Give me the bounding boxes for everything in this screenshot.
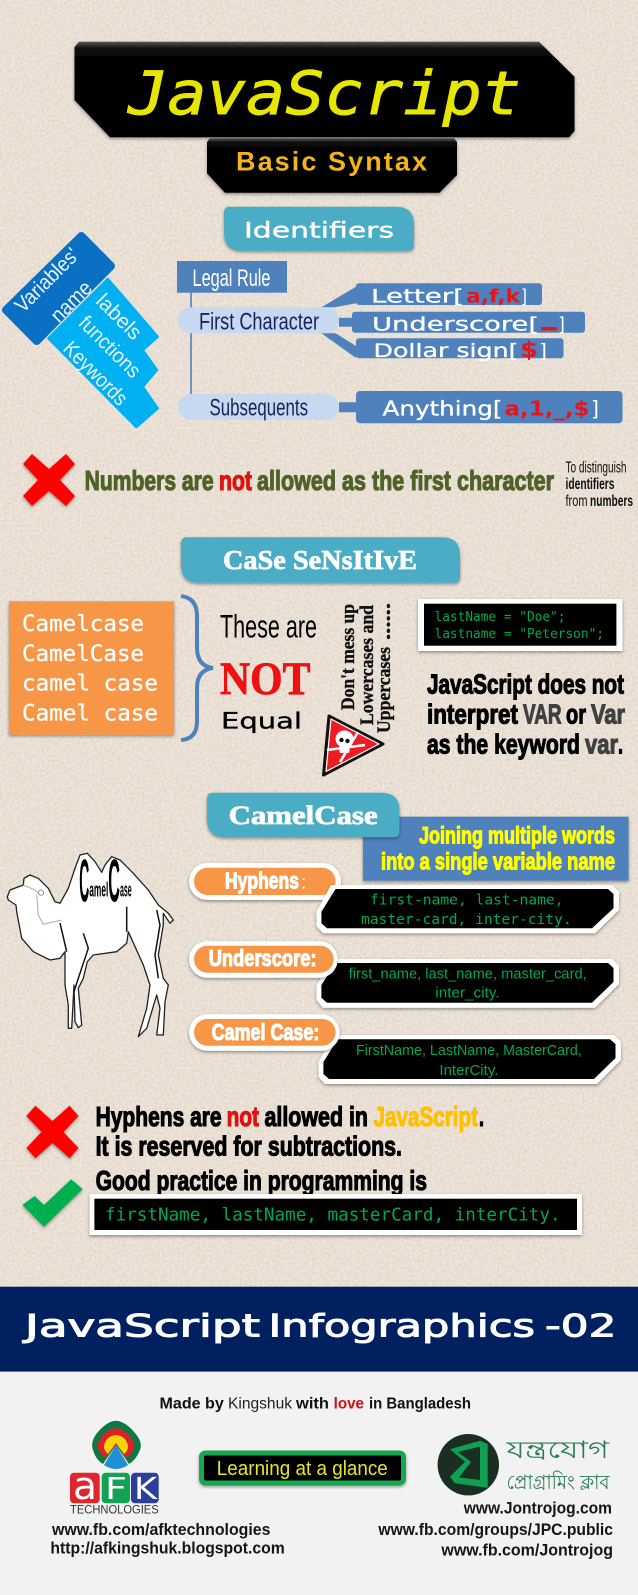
underscore rule [352, 312, 585, 336]
row: hyphens [189, 863, 619, 933]
text: var keyword: VAR [523, 698, 562, 729]
links: jontrojog: www.fb.com/Jontrojog [440, 1541, 613, 1560]
tagline badge [202, 1453, 404, 1483]
underscore rule: ] [558, 314, 565, 336]
links: jontrojog: www.Jontrojog.com [463, 1498, 612, 1517]
logo: afk [70, 1421, 159, 1516]
camel case example: FirstName, LastName, MasterCard, [356, 1042, 582, 1059]
row: camel case [189, 1014, 621, 1084]
warning: hyphens not allowed [96, 1101, 484, 1162]
subsequents pill: Subsequents [210, 395, 308, 422]
tagline badge: Learning at a glance [217, 1458, 388, 1480]
camel case label: Camel Case: [212, 1019, 319, 1045]
letter rule: a,f,k [466, 286, 520, 308]
warning: numbers not allowed: Numbers are [85, 465, 214, 496]
panel: camelcase variants: Camel case [22, 701, 158, 727]
anything rule: Anything[ [382, 397, 502, 421]
panel: camelcase variants [9, 601, 174, 735]
rotated labels: labels [91, 289, 146, 345]
heading: case sensitive: CaSe SeNsItIvE [223, 545, 417, 575]
hyphens label: : [301, 872, 306, 893]
band: series title [0, 1287, 638, 1372]
illustration: camel: ase [120, 880, 132, 902]
text: these are not equal: These are [220, 609, 317, 645]
code sample: lastName = "Doe"; [434, 610, 566, 625]
links: jontrojog [377, 1498, 613, 1560]
text: these are not equal [220, 609, 317, 734]
text: var keyword: or [566, 698, 586, 729]
rotated warning text: Uppercases [374, 647, 395, 733]
panel: camelcase variants: Camelcase [22, 611, 144, 637]
underscore example: inter_city. [435, 984, 500, 1001]
warning: hyphens not allowed: JavaScript [374, 1101, 478, 1132]
camel lettering: amel [89, 880, 108, 902]
camel case example [319, 1035, 621, 1084]
rotated labels: Keywords [58, 337, 132, 410]
letter rule [356, 283, 542, 308]
light blue staircase [49, 279, 157, 427]
logo: jontrojog [438, 1434, 611, 1495]
side note [566, 459, 633, 510]
credit line: Kingshuk [228, 1395, 292, 1412]
links: afk [50, 1520, 285, 1557]
heading: camelcase: CamelCase [229, 801, 378, 830]
rotated warning text [338, 603, 395, 733]
hyphens label: Hyphens [225, 867, 299, 893]
hyphens example [316, 885, 619, 933]
first character pill: First Character [199, 308, 319, 335]
rotated labels: Variables' [10, 244, 84, 317]
warning: hyphens not allowed: Hyphens are [96, 1101, 222, 1132]
underscore label: Underscore: [209, 945, 316, 971]
side note: from [566, 493, 588, 510]
underscore rule: Underscore[ [372, 314, 539, 336]
footer [0, 1372, 638, 1595]
dollar rule: Dollar sign[ [374, 340, 518, 362]
subtitle banner [207, 138, 457, 193]
text: var keyword: as the keyword [427, 728, 580, 759]
dollar rule: $ [520, 338, 538, 362]
legal rule box [177, 261, 287, 293]
text: var keyword: interpret [427, 698, 518, 729]
title banner: JavaScript [127, 59, 521, 129]
logo: jontrojog: প্রোগ্রামিং ক্লাব [506, 1471, 610, 1494]
good practice code [90, 1194, 582, 1235]
band: series title: Infographics [268, 1309, 535, 1345]
anything rule [356, 391, 622, 423]
dark blue tab [6, 236, 111, 341]
credit line: in Bangladesh [369, 1395, 471, 1412]
warning: numbers not allowed: not [219, 465, 252, 496]
warning: hyphens not allowed: It is reserved for subtractions. [96, 1131, 402, 1162]
hyphens label [189, 863, 341, 900]
camel case label [189, 1014, 340, 1051]
underscore example [316, 959, 619, 1008]
panel: camelcase variants: camel case [22, 671, 158, 697]
dollar rule: ] [539, 340, 547, 362]
text: var keyword: var [585, 728, 618, 759]
underscore example: first_name, last_name, master_card, [349, 965, 587, 982]
heading: case sensitive [181, 537, 460, 583]
code sample [418, 599, 622, 651]
diagram: legal rule tree [177, 261, 622, 423]
panel: camelcase variants: CamelCase [22, 641, 144, 667]
connectors [321, 287, 356, 412]
text: var keyword: . [618, 728, 623, 759]
credit line [160, 1395, 471, 1412]
warning: hyphens not allowed: . [479, 1101, 484, 1132]
warning: hyphens not allowed: not [227, 1101, 259, 1132]
logo: afk: F [105, 1472, 127, 1507]
hyphens example: master-card, inter-city. [361, 912, 572, 928]
logo: afk: TECHNOLOGIES [70, 1504, 159, 1516]
good practice: Good practice in programming is [96, 1165, 427, 1196]
rotated warning text: Don't mess up [338, 604, 359, 710]
row: underscore [189, 941, 619, 1008]
links: afk: http://afkingshuk.blogspot.com [50, 1538, 285, 1557]
anything rule: ] [591, 397, 599, 421]
links: jontrojog: www.fb.com/groups/JPC.public [377, 1520, 613, 1539]
letter rule: Letter[ [371, 286, 464, 308]
hyphens example: first-name, last-name, [370, 892, 564, 908]
warning: numbers not allowed: allowed as the first character [257, 465, 554, 496]
credit line: with [295, 1395, 329, 1412]
icon: danger sign [324, 716, 383, 775]
warning: numbers not allowed [85, 465, 554, 496]
rotated labels: functions [74, 311, 145, 383]
icon: red cross [23, 454, 75, 506]
icon: green check [22, 1179, 83, 1227]
camel case example: InterCity. [439, 1062, 498, 1079]
icon: red cross [26, 1106, 78, 1158]
text: var keyword [427, 668, 625, 759]
underscore label [189, 941, 338, 978]
panel: identifier kinds [6, 236, 157, 427]
text: these are not equal: Equal [221, 709, 302, 734]
dollar rule [356, 338, 564, 362]
camel lettering: C [108, 848, 120, 915]
text: these are not equal: NOT [220, 653, 310, 705]
rotated warning text: ...... [374, 603, 395, 640]
illustration: camel [7, 848, 173, 1037]
definition box [363, 817, 629, 881]
anything rule: a,1,_,$ [504, 397, 590, 421]
letter rule: ] [521, 286, 527, 308]
good practice code: firstName, lastName, masterCard, interCity. [105, 1206, 561, 1226]
title banner [74, 42, 574, 137]
band: series title: -02 [545, 1309, 616, 1345]
good practice [90, 1165, 582, 1235]
rotated labels: name [46, 276, 97, 327]
heading: identifiers [224, 207, 414, 251]
credit line: love [334, 1395, 364, 1412]
brace [181, 596, 213, 740]
camel lettering: C [79, 848, 89, 915]
rotated labels [10, 244, 146, 410]
heading: identifiers: Identifiers [244, 218, 394, 242]
logo: jontrojog: যন্ত্রযোগ [505, 1437, 611, 1464]
subtitle banner: Basic Syntax [236, 147, 427, 177]
heading: camelcase [207, 793, 400, 837]
band: series title: JavaScript [22, 1309, 260, 1345]
warning: hyphens not allowed: allowed in [264, 1101, 368, 1132]
text: var keyword: Var [591, 698, 625, 729]
links: afk: www.fb.com/afktechnologies [51, 1520, 270, 1539]
credit line: Made by [160, 1395, 224, 1412]
rotated warning text: Lowercases and [357, 605, 378, 725]
logo: afk: a [73, 1464, 97, 1508]
code sample: lastname = "Peterson"; [434, 627, 604, 642]
legal rule box: Legal Rule [192, 265, 270, 292]
logo: afk: K [134, 1472, 159, 1507]
